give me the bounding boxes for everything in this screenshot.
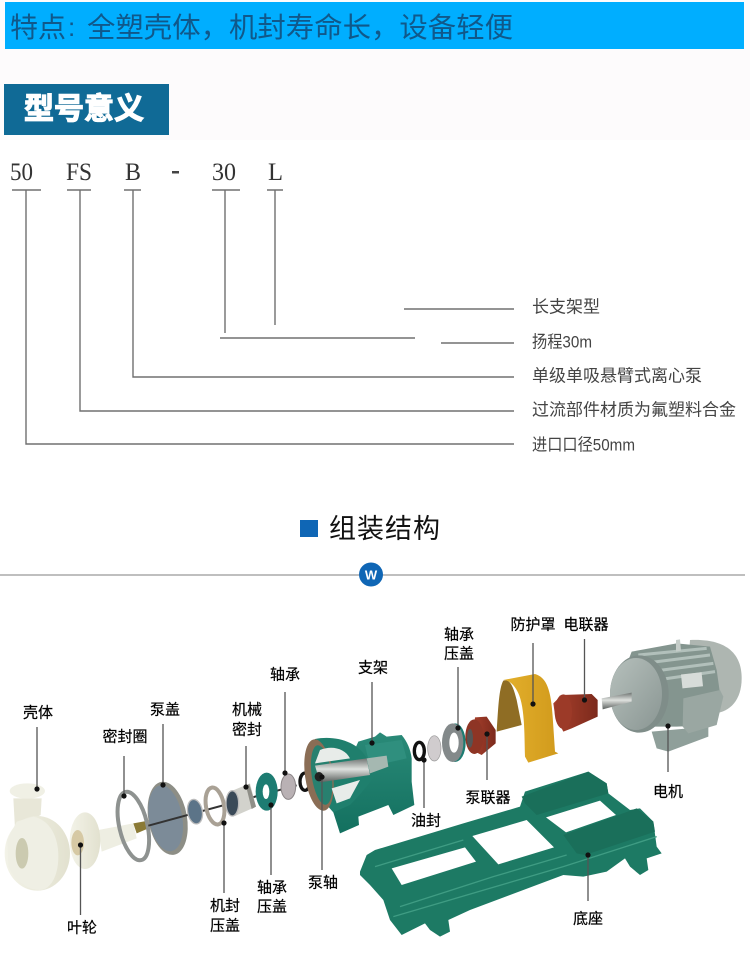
part: pump coupling: [465, 717, 496, 755]
model code descriptions: 长支架型: [532, 298, 600, 316]
part labels: 泵轴: [308, 874, 338, 892]
model code descriptions: 单级单吸悬臂式离心泵: [532, 366, 702, 386]
part labels: 轴承: [270, 666, 300, 684]
feature banner: [5, 2, 744, 49]
part labels: 轴承: [444, 626, 474, 644]
part labels: 机械: [232, 702, 262, 718]
heading: model meaning: [4, 84, 169, 135]
part labels: [23, 616, 683, 936]
model code characters: B: [125, 159, 141, 186]
part: bearing gland: [442, 723, 466, 762]
feature banner: 全塑壳体，机封寿命长，设备轻便: [87, 12, 513, 43]
exploded pump drawing, left parts: [148, 773, 310, 826]
part labels: 电联器: [563, 616, 609, 634]
part labels: 轴承: [257, 880, 287, 896]
part: static seal: [186, 798, 204, 825]
part: motor coupling: [553, 694, 598, 732]
part labels: 油封: [411, 812, 441, 830]
part: bearing gland: [256, 773, 278, 811]
part: oil seal: [414, 742, 424, 760]
part: mechanical seal: [226, 783, 256, 816]
part: impeller: [70, 812, 148, 869]
part: oil ring: [300, 773, 310, 790]
divider with W badge: [0, 562, 745, 586]
heading: assembly structure: 组装结构: [329, 514, 440, 544]
part labels: 密封圈: [102, 728, 148, 746]
part: bracket: [300, 732, 414, 833]
part labels: 叶轮: [67, 920, 97, 936]
part: motor: [602, 639, 742, 752]
feature banner: 特点: [10, 12, 66, 43]
top background: [0, 0, 750, 140]
part labels: 壳体: [23, 704, 53, 722]
exploded pump drawing, right parts: [414, 674, 598, 763]
model code characters: [10, 159, 283, 186]
part labels: 电机: [653, 784, 683, 800]
model code descriptions: 过流部件材质为氟塑料合金: [532, 400, 736, 420]
part: pump cover: [142, 779, 193, 858]
model code characters: 50: [10, 159, 33, 186]
part labels: 支架: [358, 660, 388, 676]
part: bearing: [428, 736, 441, 761]
part labels: 密封: [232, 722, 262, 738]
divider with W badge: W: [365, 568, 378, 582]
part labels: 底座: [573, 910, 603, 928]
callout leader lines with dots: [34, 639, 671, 915]
part: bearing: [281, 774, 296, 799]
part: pump shaft: [148, 785, 297, 826]
part labels: 机封: [210, 898, 240, 914]
model code descriptions: [532, 298, 736, 454]
part labels: 压盖: [444, 646, 474, 662]
part labels: 压盖: [257, 898, 287, 916]
heading: model meaning: 型号意义: [24, 93, 144, 126]
part: sealing ring: [112, 789, 155, 863]
part labels: 泵联器: [465, 790, 511, 806]
part labels: 压盖: [210, 918, 240, 934]
model code characters: L: [268, 159, 283, 186]
feature banner: :: [68, 12, 75, 42]
part: seal gland: [203, 786, 227, 826]
model code characters: FS: [66, 159, 92, 186]
exploded pump drawing, front parts: [5, 779, 193, 891]
part labels: 泵盖: [150, 702, 180, 718]
part: casing: [5, 783, 70, 891]
part: protective guard: [497, 674, 558, 763]
model code leader lines: [12, 190, 514, 444]
model code characters: 30: [212, 159, 236, 186]
model code descriptions: 进口口径50mm: [532, 436, 635, 454]
part labels: 防护罩: [510, 616, 556, 634]
model code descriptions: 扬程30m: [532, 332, 592, 352]
part: base: [360, 772, 662, 937]
